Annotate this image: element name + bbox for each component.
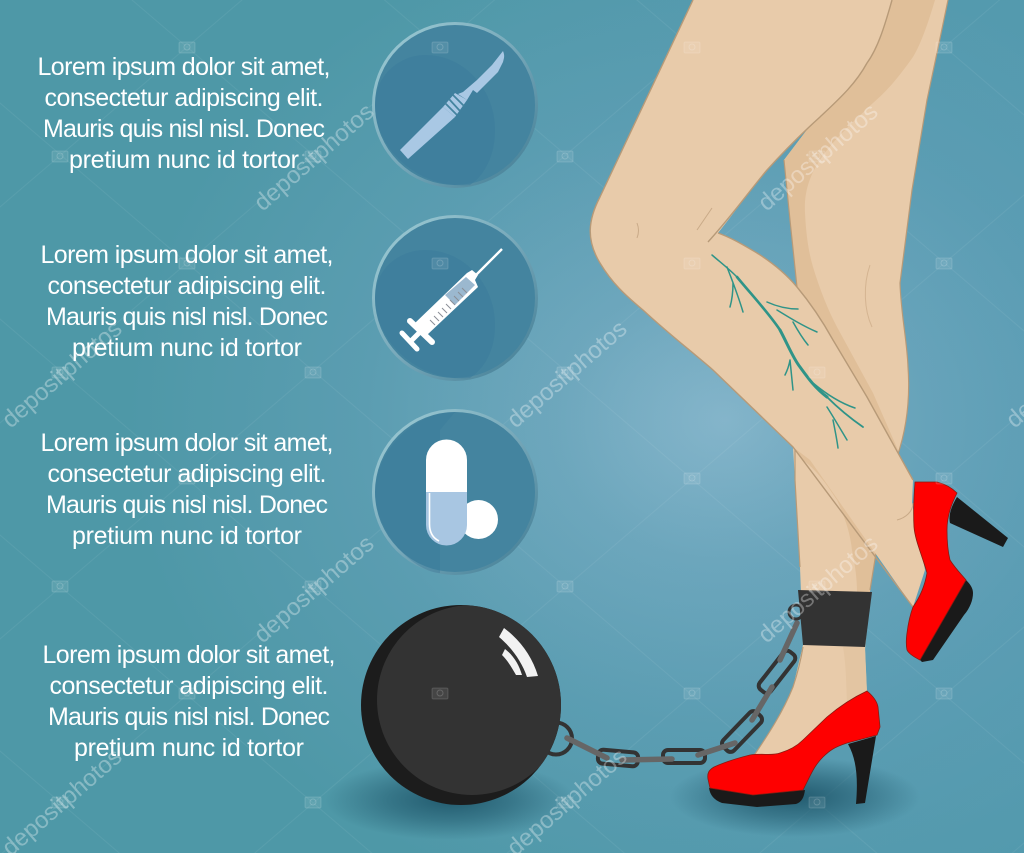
text block 2: Mauris quis nisl nisl. Donec	[46, 303, 328, 331]
ball ring	[540, 722, 572, 754]
text block 1: consectetur adipiscing elit.	[44, 84, 324, 112]
sole	[920, 580, 973, 662]
back leg	[753, 0, 948, 760]
text block 2: pretium nunc id tortor	[72, 334, 302, 362]
iron ball	[361, 605, 567, 805]
watermarks: depositphotos	[753, 98, 883, 217]
icon: syringe in circle	[374, 216, 536, 380]
icon: scalpel in circle	[374, 24, 536, 186]
text block 3	[40, 429, 334, 550]
sole	[709, 788, 805, 807]
text block 3: consectetur adipiscing elit.	[48, 460, 326, 488]
text block 2: Lorem ipsum dolor sit amet,	[40, 241, 334, 269]
standing shoe	[708, 691, 880, 807]
text block 2: consectetur adipiscing elit.	[48, 272, 326, 300]
watermarks: depositphotos	[502, 315, 632, 434]
shadow band upper	[784, 0, 935, 470]
icon: varicose vein	[712, 255, 863, 448]
ankle cuff	[798, 590, 872, 647]
heel	[949, 497, 1008, 547]
raised shoe	[906, 482, 1008, 662]
shadow band lower	[793, 447, 885, 592]
text block 1: Mauris quis nisl nisl. Donec	[43, 115, 325, 143]
text block 1: pretium nunc id tortor	[69, 146, 299, 174]
outline	[753, 0, 948, 757]
chain	[540, 605, 803, 767]
text block 4: pretium nunc id tortor	[74, 734, 304, 762]
upper	[708, 691, 880, 795]
watermarks: depositphotos	[0, 315, 127, 434]
text block 2	[40, 241, 334, 362]
icon: pills in circle	[374, 410, 536, 574]
text block 4: Mauris quis nisl nisl. Donec	[48, 703, 330, 731]
text block 4	[42, 641, 336, 762]
text block 1: Lorem ipsum dolor sit amet,	[38, 53, 330, 81]
watermarks: depositphotos	[249, 530, 379, 649]
heel	[848, 736, 876, 804]
text block 3: pretium nunc id tortor	[72, 522, 302, 550]
front leg with vein	[590, 0, 925, 607]
floor shadow under shoe	[670, 757, 920, 837]
text block 3: Mauris quis nisl nisl. Donec	[46, 491, 328, 519]
ball highlight	[499, 628, 538, 677]
text block 3: Lorem ipsum dolor sit amet,	[40, 429, 334, 457]
text block 4: consectetur adipiscing elit.	[50, 672, 328, 700]
watermark camera marks	[52, 42, 952, 808]
watermarks: depositphotos	[249, 98, 379, 217]
text block 1	[38, 53, 330, 174]
upper	[906, 482, 966, 660]
text block 4: Lorem ipsum dolor sit amet,	[42, 641, 336, 669]
floor shadow under ball	[325, 760, 575, 840]
watermarks: depositphotos	[753, 530, 883, 649]
